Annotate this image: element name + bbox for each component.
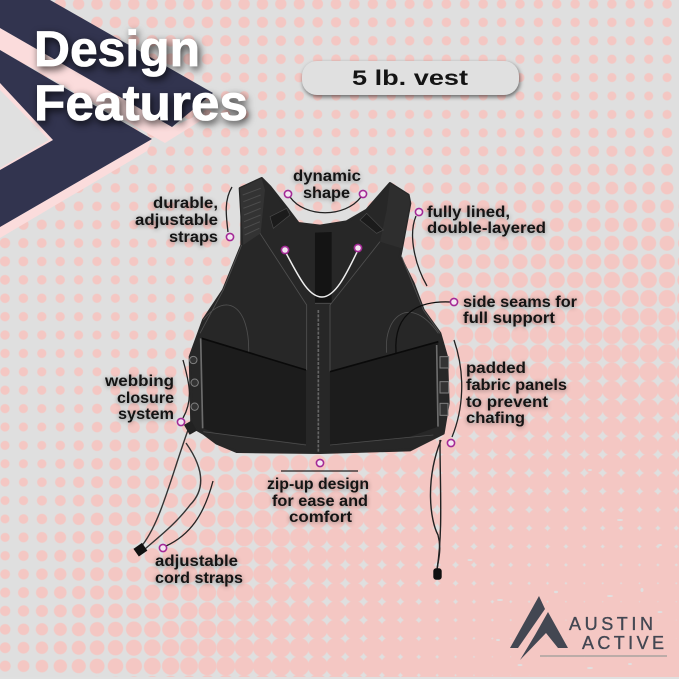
label: webbing closure system: system — [118, 406, 174, 423]
label: zip-up design for ease and comfort: comfort — [289, 509, 352, 526]
logo: Austin Active — [510, 596, 667, 660]
label: fully lined, double-layered — [413, 204, 546, 286]
label: fully lined, double-layered: double-layered — [427, 220, 546, 237]
label: padded fabric panels to prevent chafing: fabric panels — [466, 377, 567, 394]
title — [34, 21, 248, 131]
label: webbing closure system: webbing — [104, 373, 174, 390]
label: zip-up design for ease and comfort: zip-up design — [267, 476, 369, 493]
label: durable, adjustable straps — [135, 187, 234, 246]
neck panel — [315, 232, 332, 303]
logo: Austin Active: AUSTIN — [569, 614, 653, 634]
weight pill: 5 lb. vest — [352, 67, 468, 90]
vest straps — [240, 178, 410, 248]
label: adjustable cord straps: cord straps — [155, 570, 243, 587]
chevron graphic — [0, 0, 213, 238]
title: Design — [34, 21, 200, 77]
vest body — [190, 178, 448, 453]
label: side seams for full support: full support — [463, 310, 555, 327]
label: padded fabric panels to prevent chafing: to prevent — [466, 394, 548, 411]
label: webbing closure system — [104, 360, 189, 426]
label: fully lined, double-layered: fully lined, — [427, 204, 510, 221]
label: zip-up design for ease and comfort: for ease and — [272, 493, 368, 510]
label: adjustable cord straps — [155, 481, 243, 587]
paper speckle texture — [0, 469, 679, 679]
label: durable, adjustable straps: durable, — [153, 195, 218, 212]
label: durable, adjustable straps: straps — [169, 229, 218, 246]
label: webbing closure system: closure — [117, 390, 174, 407]
right drawcord — [430, 440, 441, 579]
label: adjustable cord straps: adjustable — [155, 553, 238, 570]
label: durable, adjustable straps: adjustable — [135, 212, 218, 229]
vest — [190, 178, 449, 453]
title: Features — [34, 75, 248, 131]
left drawcord — [134, 422, 201, 556]
label: zip-up design for ease and comfort — [267, 459, 369, 526]
weight pill — [302, 61, 519, 95]
logo: Austin Active: ACTIVE — [582, 633, 664, 653]
label: side seams for full support — [396, 294, 577, 353]
neckline callout — [281, 244, 362, 297]
label: dynamic shape — [284, 168, 367, 213]
vest seams — [200, 233, 440, 372]
label: padded fabric panels to prevent chafing — [447, 340, 567, 447]
label: padded fabric panels to prevent chafing: padded — [466, 360, 526, 377]
label: dynamic shape: dynamic — [293, 168, 361, 185]
zipper — [316, 310, 321, 453]
label: dynamic shape: shape — [303, 185, 350, 202]
label: padded fabric panels to prevent chafing: chafing — [466, 410, 525, 427]
label: side seams for full support: side seams for — [463, 294, 577, 311]
lower panels — [201, 338, 438, 445]
side buckles — [190, 356, 449, 415]
